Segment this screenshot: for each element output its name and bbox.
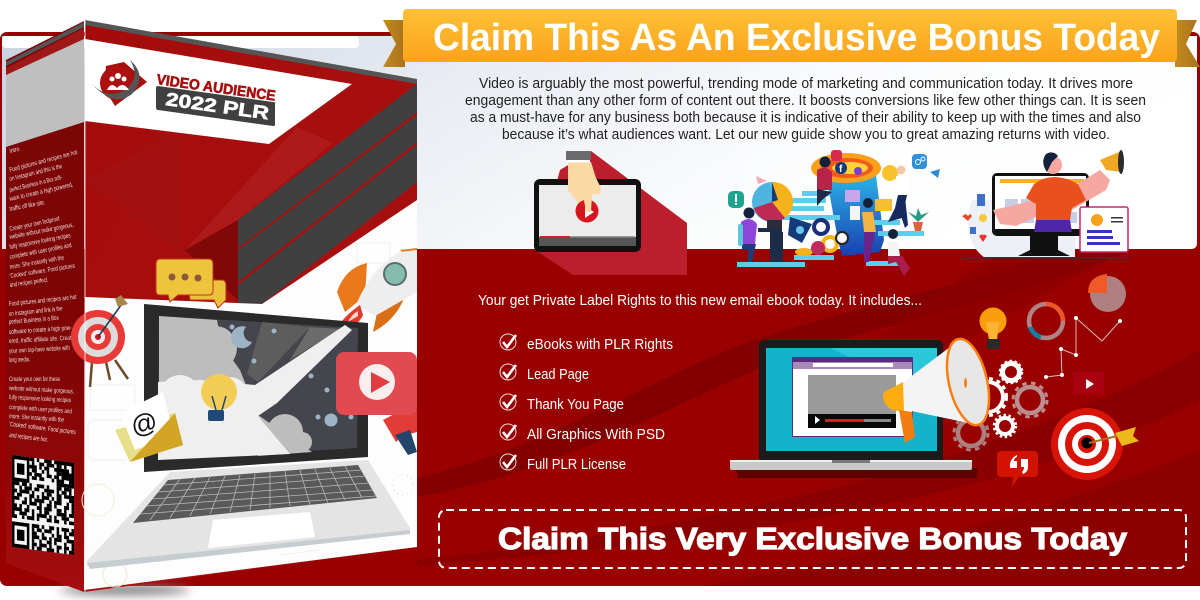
title ribbon bbox=[383, 9, 1200, 67]
pie icon bbox=[1088, 274, 1126, 312]
envelope bbox=[875, 199, 892, 211]
spine text: Create your own foolproof bbox=[9, 215, 60, 233]
qr code bbox=[12, 455, 74, 555]
lower spine highlight bbox=[84, 20, 86, 592]
megaphone bbox=[897, 341, 978, 425]
spine text: Create your own for these bbox=[9, 376, 60, 383]
faded background icons bbox=[82, 243, 413, 587]
spine text: fully responsive looking recipes bbox=[9, 394, 72, 404]
spine text: perfect Business in a Box bbox=[9, 315, 59, 326]
ribbon body bbox=[403, 9, 1177, 62]
email envelope: @ bbox=[127, 405, 161, 441]
spine text: complete with user profiles and bbox=[9, 404, 72, 415]
spine text bbox=[8, 146, 78, 444]
target bbox=[1051, 408, 1139, 480]
laptop bbox=[87, 304, 410, 569]
illustration: laptop with megaphone and marketing icons bbox=[730, 274, 1139, 487]
laptop base bbox=[87, 460, 410, 566]
item: lead page bbox=[500, 364, 589, 383]
spine text: complete with user profiles and bbox=[9, 242, 72, 261]
target bbox=[71, 295, 128, 387]
spine text: Food pictures and recipes are hot bbox=[9, 149, 78, 174]
man with lightbulb bbox=[882, 165, 898, 181]
laptop screen frame bbox=[144, 304, 368, 472]
spine text: more. She instantly with the bbox=[9, 413, 64, 424]
spine text: on Instagram and link is the bbox=[8, 305, 63, 318]
product box bbox=[6, 20, 417, 595]
dashed outline bbox=[439, 510, 1186, 568]
baseline bbox=[961, 257, 1130, 258]
intro paragraph: engagement than any other form of content out there. It boosts conversions like few other things can. It is seen bbox=[465, 92, 1146, 109]
blob bbox=[968, 200, 1075, 258]
intro paragraph: Video is arguably the most powerful, trending mode of marketing and communication today. It drives more bbox=[479, 75, 1133, 92]
speech bubble with gears bbox=[912, 154, 927, 169]
person with laptop bbox=[744, 208, 754, 218]
spine text: website without make gorgeous, bbox=[8, 222, 74, 241]
white logo label bbox=[85, 39, 352, 144]
gears bbox=[954, 361, 1047, 450]
illustration: tablet with pointing hand bbox=[534, 151, 687, 275]
spine text: on Instagram and this is the bbox=[9, 163, 63, 183]
stars and moon bbox=[230, 324, 354, 426]
alert bubble bbox=[728, 191, 744, 208]
call to action text: Claim This Very Exclusive Bonus Today bbox=[498, 521, 1128, 556]
checklist bbox=[500, 334, 673, 473]
white art area bbox=[84, 200, 417, 590]
call to action bbox=[439, 510, 1186, 568]
item: thank you page bbox=[500, 394, 624, 413]
top light panel bbox=[2, 36, 1197, 249]
version text: 2022 PLR bbox=[164, 88, 270, 123]
ribbon tail right bbox=[1175, 20, 1200, 67]
tablet icon bbox=[788, 217, 812, 243]
intro paragraph: because it’s what audiences want. Let our new guide show you to great amazing returns with video. bbox=[502, 126, 1110, 143]
keyboard bbox=[133, 465, 377, 523]
version badge bbox=[156, 86, 275, 126]
ribbon tail left bbox=[383, 20, 405, 67]
subheading: Your get Private Label Rights to this new email ebook today. It includes... bbox=[478, 292, 922, 309]
spine text: website without make gorgeous, bbox=[8, 385, 74, 395]
item: ebooks: eBooks with PLR Rights bbox=[527, 336, 673, 353]
spine text: your own top-have website with bbox=[9, 345, 70, 355]
illustration: woman with megaphone and monitor bbox=[961, 150, 1130, 258]
title: Claim This As An Exclusive Bonus Today bbox=[433, 17, 1160, 59]
spine text: Intro bbox=[9, 146, 20, 155]
spine text: ered, traffic affiliate site. Create bbox=[9, 335, 74, 345]
data card bbox=[1080, 207, 1128, 252]
woman bbox=[1044, 156, 1062, 174]
spine text: traffic off like site. bbox=[9, 199, 46, 213]
dark diagonal stripes bbox=[238, 84, 417, 304]
grey label bbox=[6, 39, 84, 147]
orange rocket bbox=[335, 248, 417, 332]
paper planes bbox=[756, 176, 767, 184]
plant bbox=[913, 222, 923, 231]
intro paragraph: as a must-have for any business both because it is indicative of their ability to keep up with the times and also bbox=[470, 109, 1141, 126]
front face bbox=[71, 20, 417, 592]
monitor bbox=[992, 173, 1089, 236]
pie chart bbox=[752, 182, 792, 222]
sitting person on funnel bbox=[820, 156, 830, 168]
left face bbox=[6, 21, 84, 592]
video play icon bbox=[336, 352, 417, 415]
spine text: 'Cooked' software. Food pictures bbox=[9, 263, 76, 280]
play button icon bbox=[1073, 372, 1104, 395]
funnel bbox=[826, 175, 884, 256]
laptop bbox=[736, 468, 977, 478]
lightbulb bbox=[201, 374, 237, 410]
item: graphics: All Graphics With PSD bbox=[527, 426, 665, 443]
spine text: and recipes are hot. bbox=[9, 432, 48, 444]
quote bubble bbox=[997, 451, 1038, 487]
arms bbox=[993, 198, 1042, 226]
megaphone bbox=[1100, 152, 1122, 172]
box shadow bbox=[60, 585, 190, 595]
product name: VIDEO AUDIENCE bbox=[155, 72, 277, 105]
spine text: Food pictures and recipes are hot bbox=[8, 294, 77, 308]
spine text: 'Cooked' software. Food pictures bbox=[9, 421, 77, 436]
donut chart bbox=[1029, 304, 1063, 338]
illustration: marketing team funnel: f bbox=[839, 164, 843, 175]
chat bubbles bbox=[156, 259, 226, 308]
illustration: marketing team funnel bbox=[728, 150, 940, 276]
spine text: ware to create a high powered, bbox=[8, 181, 74, 203]
small megaphone bbox=[383, 402, 417, 455]
spine text: and recipes perfect. bbox=[9, 277, 49, 289]
gears and coins bbox=[814, 220, 828, 234]
top edge bbox=[85, 20, 417, 84]
bulb icon bbox=[980, 308, 1006, 349]
clouds bbox=[159, 316, 312, 456]
reaction icons bbox=[977, 194, 985, 206]
seated woman bbox=[888, 229, 898, 239]
facets bbox=[185, 127, 333, 250]
email envelope bbox=[115, 392, 183, 462]
item: lead page: Lead Page bbox=[527, 366, 589, 383]
intro paragraph bbox=[465, 75, 1146, 143]
line chart bbox=[1044, 316, 1122, 379]
browser window bbox=[792, 357, 913, 437]
standing woman bbox=[863, 198, 873, 208]
spine text: software to create a high pow- bbox=[9, 325, 72, 336]
screen bbox=[158, 316, 358, 460]
item: thank you page: Thank You Page bbox=[527, 396, 624, 413]
touchpad bbox=[208, 512, 315, 548]
item: license: Full PLR License bbox=[527, 456, 626, 473]
logo bbox=[92, 60, 147, 106]
stairs bbox=[737, 191, 924, 267]
spine text: fully responsive looking recipes bbox=[9, 232, 72, 251]
white clouds bbox=[158, 325, 352, 460]
spine text: long media. bbox=[9, 356, 30, 364]
facebook and pin icons bbox=[835, 162, 847, 174]
item: license bbox=[500, 454, 626, 473]
spine text: perfect Business in a Box soft- bbox=[9, 174, 63, 194]
spine text: more. She instantly with the bbox=[9, 254, 65, 271]
